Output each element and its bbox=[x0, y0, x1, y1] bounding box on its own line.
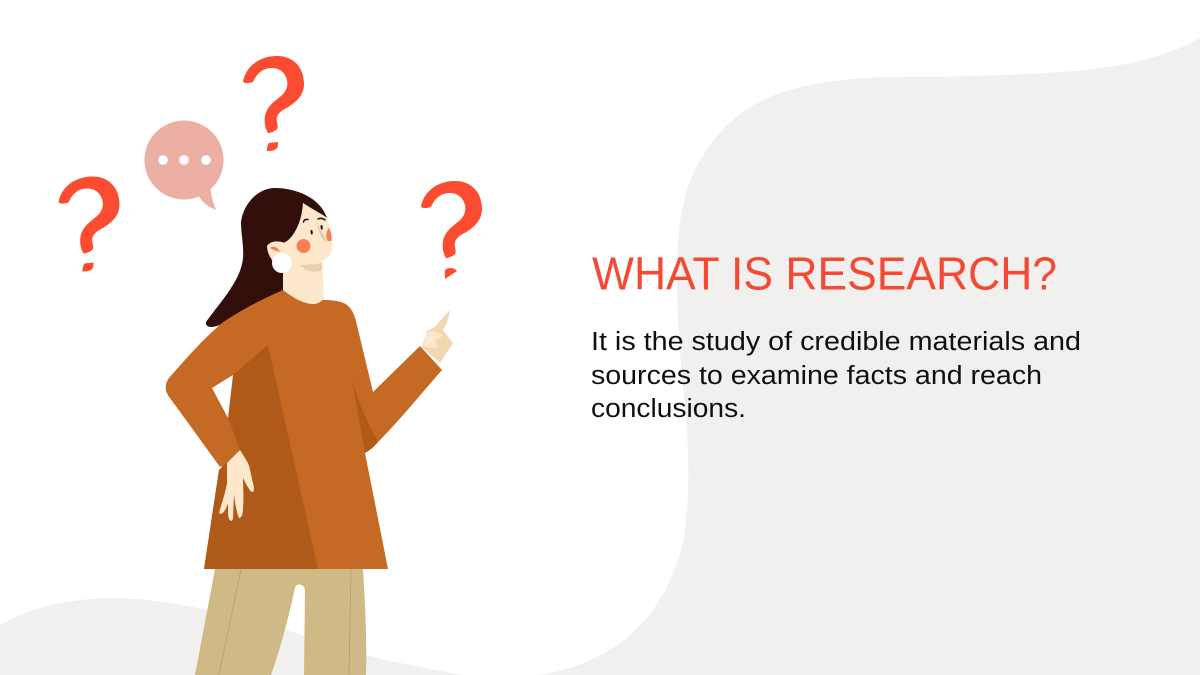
trousers bbox=[195, 569, 366, 675]
body text: conclusions. bbox=[591, 395, 746, 423]
cheek right bbox=[326, 228, 332, 241]
body text bbox=[591, 328, 1081, 423]
eyes and brows bbox=[304, 218, 325, 234]
trouser creases bbox=[219, 569, 351, 675]
neck shadow bbox=[300, 263, 322, 272]
sweater shadow: torso bbox=[204, 345, 318, 569]
nose bbox=[316, 221, 327, 242]
armpit gap bbox=[212, 375, 233, 418]
left hand bbox=[219, 450, 254, 521]
face bbox=[283, 203, 332, 265]
inner ear bbox=[270, 247, 280, 252]
illustration: woman bbox=[166, 188, 453, 675]
right hand bbox=[422, 310, 453, 363]
body text: It is the study of credible materials and bbox=[591, 328, 1081, 356]
ear bbox=[267, 241, 285, 264]
sweater bbox=[166, 290, 442, 569]
earring bbox=[272, 253, 292, 273]
body text: sources to examine facts and reach bbox=[591, 362, 1042, 390]
icon: question mark left bbox=[58, 176, 120, 272]
title: WHAT IS RESEARCH? bbox=[592, 248, 1057, 300]
icon: question mark right bbox=[421, 181, 482, 279]
icon: question mark top bbox=[243, 56, 304, 151]
sweater shadow: arm fold bbox=[352, 380, 378, 453]
sleeve left forearm bbox=[168, 380, 240, 467]
background blob: bottom left bbox=[0, 598, 463, 675]
hair bbox=[206, 188, 327, 327]
neck bbox=[283, 255, 324, 304]
background blob: right bbox=[537, 38, 1200, 675]
cheek left bbox=[296, 239, 310, 253]
icon: speech bubble bbox=[144, 120, 224, 210]
